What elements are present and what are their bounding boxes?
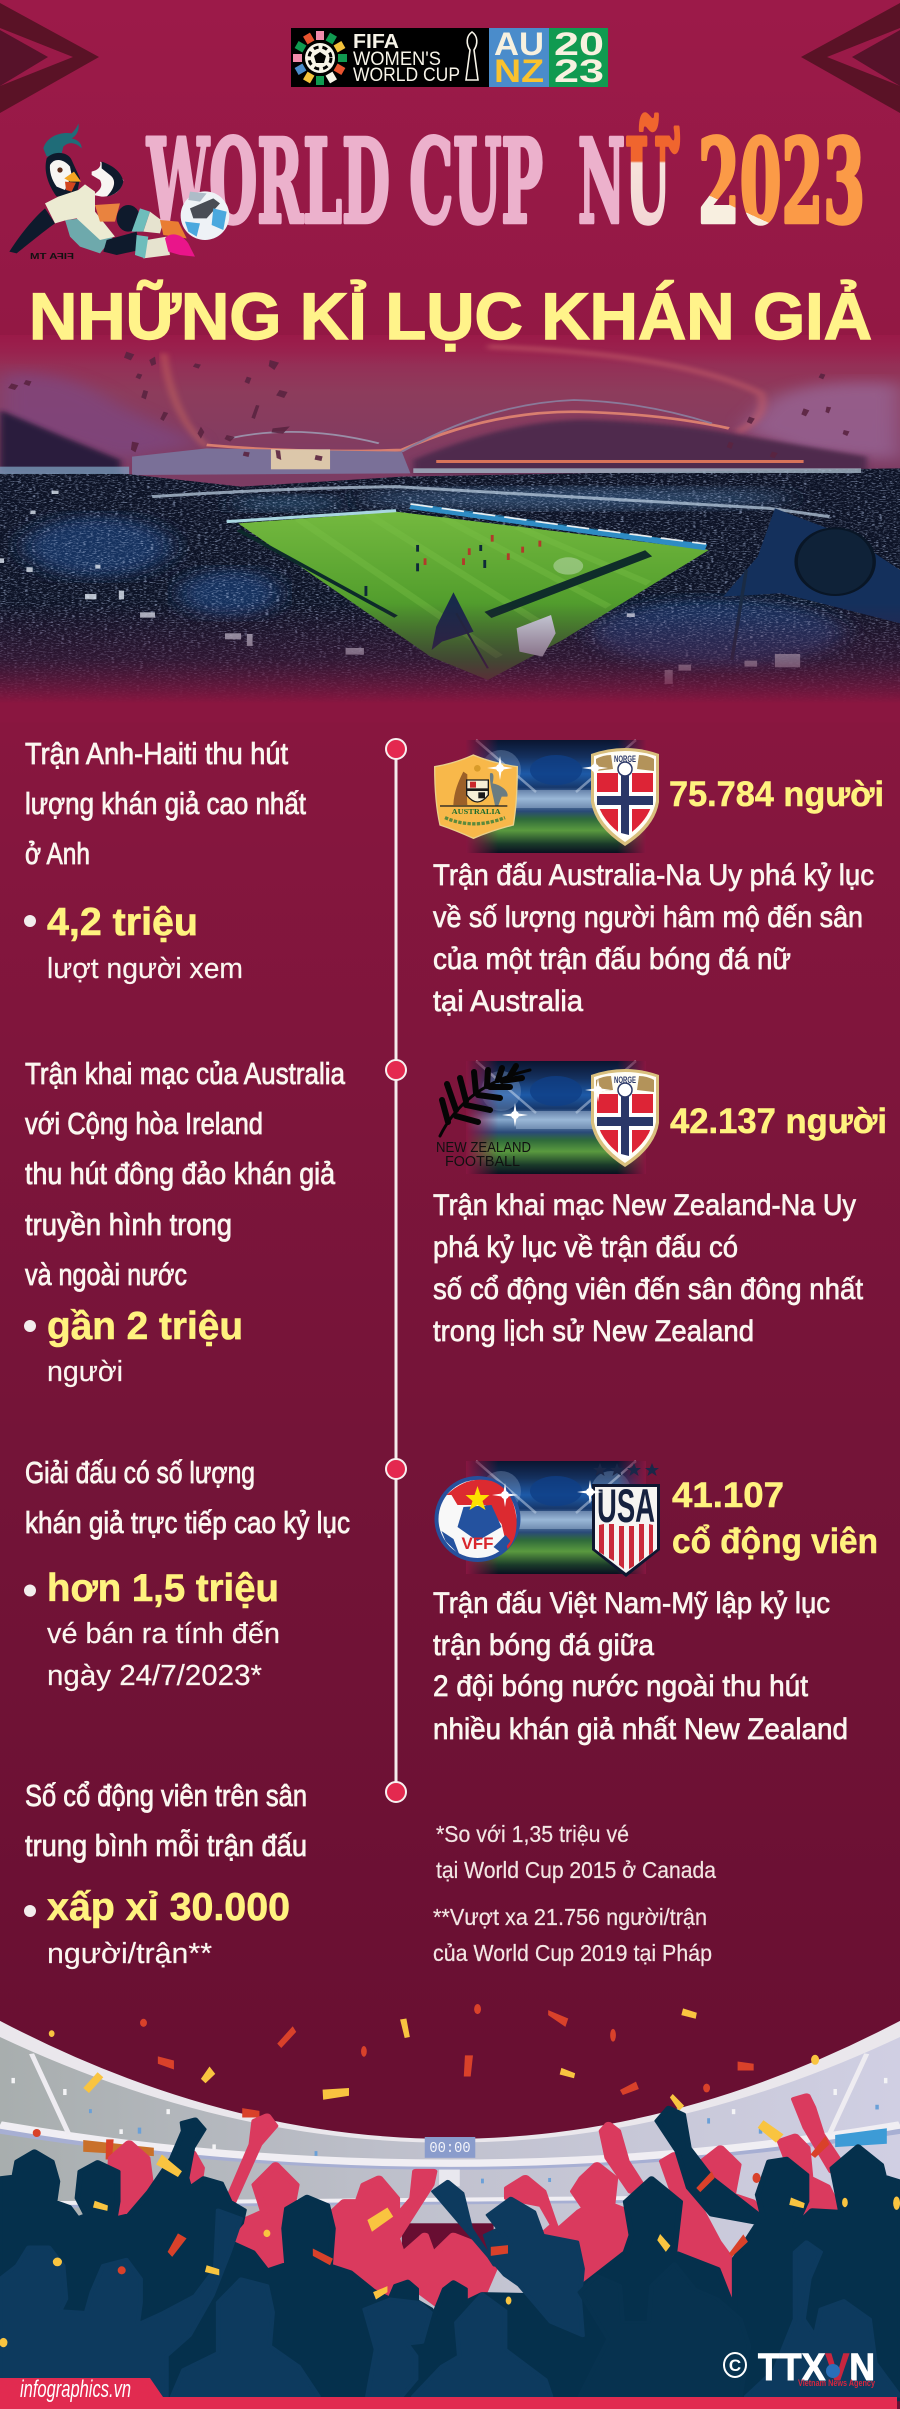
- text: New Zealand - Na Uy: trong lịch sử New Zealand: [433, 1315, 754, 1348]
- match card 1: Australia - Norway: [435, 740, 884, 853]
- flags: [432, 592, 474, 650]
- logo: TTXVN: TTXVN: [758, 2347, 875, 2389]
- left block 1: Anh-Haiti: ở Anh: [25, 836, 90, 871]
- text: Australia - Na Uy: tại Australia: [433, 985, 583, 1018]
- source: infographics.vn: infographics.vn: [20, 2376, 131, 2403]
- footnotes: của World Cup 2019 tại Pháp: [433, 1940, 712, 1966]
- stat: 42.137 người: 42.137 người: [670, 1102, 887, 1141]
- dark crowd layer: [0, 2107, 900, 2400]
- icon: Norway crest: NORGE: [614, 1075, 636, 1085]
- left block 3: khán giả trực tiếp: [24, 1455, 350, 1692]
- logo: FIFA Women's World Cup: FIFA: [353, 31, 399, 53]
- illustration: cheering crowd in stadium: [0, 2004, 900, 2400]
- timeline dot 4: [386, 1782, 406, 1802]
- text: New Zealand - Na Uy: [433, 1189, 864, 1348]
- icon: USA crest: USA: [597, 1479, 655, 1532]
- left block 3: khán giả trực tiếp: vé bán ra tính đến: [47, 1618, 280, 1650]
- text: New Zealand - Na Uy: số cổ động viên đến sân đông nhất: [433, 1273, 864, 1306]
- left block 2: khai mạc Australia: truyền hình trong: [25, 1207, 232, 1242]
- icon: trophy: [466, 32, 478, 80]
- left block 1: Anh-Haiti: [24, 736, 306, 985]
- left block 4: trung bình mỗi trận: trung bình mỗi trận đấu: [25, 1828, 307, 1863]
- icon: USA crest: [592, 1463, 660, 1577]
- left block 4: trung bình mỗi trận: [24, 1778, 307, 1970]
- footer bar: [0, 2376, 897, 2409]
- logo: FIFA Women's World Cup: WOMEN'S: [353, 49, 441, 70]
- stat: 41.107 cổ động viên: cổ động viên: [672, 1522, 878, 1561]
- stadium photo: [0, 335, 900, 723]
- text: Australia - Na Uy: [433, 859, 874, 1018]
- stands: [0, 2021, 900, 2336]
- logo: FIFA Women's World Cup: NZ: [494, 53, 544, 89]
- corner chevrons: right: [801, 3, 900, 113]
- subtitle: Những kỉ lục khán giả: NHỮNG KỈ LỤC KHÁN GIẢ: [29, 279, 872, 353]
- match card 2: New Zealand - Norway: NEW ZEALAND: [436, 1139, 531, 1156]
- timeline dot 3: [386, 1459, 406, 1479]
- left block 4: trung bình mỗi trận: Số cổ động viên trên sân: [25, 1778, 307, 1813]
- mascot: Tazuni with ball: FIFA TM: [30, 252, 74, 261]
- logo: TTXVN: C: [729, 2356, 741, 2375]
- mascot: Tazuni with ball: [9, 123, 229, 261]
- logo: FIFA Women's World Cup: AU: [494, 26, 544, 62]
- left block 1: Anh-Haiti: 4,2 triệu: [47, 901, 198, 944]
- left block 1: Anh-Haiti: lượt người xem: [47, 953, 243, 985]
- text: Việt Nam - Mỹ: [433, 1587, 848, 1746]
- text: Australia - Na Uy: về số lượng người hâm mộ đến sân: [433, 901, 863, 934]
- stat: 75.784 người: 75.784 người: [669, 775, 884, 814]
- left block 2: khai mạc Australia: gần 2 triệu: [47, 1305, 243, 1348]
- crowd stands: [0, 468, 900, 720]
- text: Việt Nam - Mỹ: Trận đấu Việt Nam-Mỹ lập kỷ lục: [433, 1587, 830, 1620]
- left block 2: khai mạc Australia: thu hút đông đảo khán giả: [25, 1156, 336, 1191]
- timeline: [386, 739, 406, 1802]
- sky confetti: [8, 352, 850, 461]
- stat: 41.107 cổ động viên: [672, 1476, 878, 1561]
- icon: Australia crest: AUSTRALIA: [452, 807, 501, 816]
- left block 4: trung bình mỗi trận: xấp xỉ 30.000: [47, 1886, 290, 1929]
- left block 1: Anh-Haiti: lượng khán giả cao nhất: [25, 786, 306, 821]
- confetti: [33, 2004, 819, 2160]
- left block 3: khán giả trực tiếp: Giải đấu có số lượng: [25, 1455, 255, 1490]
- icon: emblem: [293, 31, 347, 85]
- footnotes: **Vượt xa 21.756 người/trận: [433, 1904, 707, 1930]
- logo: FIFA Women's World Cup: [291, 26, 608, 89]
- logo: FIFA Women's World Cup: 23: [554, 53, 604, 89]
- left block 2: khai mạc Australia: người: [47, 1356, 123, 1388]
- left block 1: Anh-Haiti: Trận Anh-Haiti thu hút: [25, 736, 288, 771]
- pink crowd layer: [109, 2096, 841, 2312]
- timeline dot 2: [386, 1060, 406, 1080]
- icon: New Zealand fern: [440, 1066, 530, 1136]
- icon: Norway crest: [591, 748, 659, 846]
- text: Australia - Na Uy: Trận đấu Australia-Na Uy phá kỷ lục: [433, 859, 874, 892]
- logo: FIFA Women's World Cup: 20: [554, 26, 604, 62]
- icon: VFF crest: VFF: [462, 1534, 494, 1553]
- scoreboard: 00:00: [429, 2140, 471, 2157]
- pitch: [238, 512, 709, 680]
- match card 2: New Zealand - Norway: [436, 1061, 887, 1174]
- left block 2: khai mạc Australia: với Cộng hòa Ireland: [25, 1106, 263, 1141]
- text: Việt Nam - Mỹ: nhiều khán giả nhất New Zealand: [433, 1713, 848, 1746]
- icon: Norway crest: [591, 1069, 659, 1167]
- left block 2: khai mạc Australia: và ngoài nước: [25, 1257, 187, 1292]
- icon: Australia crest: [435, 755, 517, 838]
- logo: TTXVN: Vietnam News Agency: [798, 2378, 875, 2388]
- confetti over crowd: [0, 2120, 900, 2347]
- left block 4: trung bình mỗi trận: người/trận**: [47, 1938, 212, 1970]
- text: New Zealand - Na Uy: phá kỷ lục về trận đấu có: [433, 1231, 738, 1264]
- footnotes: [433, 1821, 716, 1966]
- front crowd layer: [0, 2181, 900, 2396]
- text: Australia - Na Uy: của một trận đấu bóng đá nữ: [433, 943, 791, 976]
- footnotes: tại World Cup 2015 ở Canada: [436, 1857, 716, 1883]
- text: Việt Nam - Mỹ: 2 đội bóng nước ngoài thu hút: [433, 1670, 809, 1703]
- timeline dot 1: [386, 739, 406, 759]
- icon: VFF crest: [434, 1476, 520, 1562]
- text: Việt Nam - Mỹ: trận bóng đá giữa: [433, 1629, 654, 1662]
- footnotes: *So với 1,35 triệu vé: [436, 1821, 629, 1847]
- scoreboard: [425, 2137, 475, 2158]
- text: New Zealand - Na Uy: Trận khai mạc New Zealand-Na Uy: [433, 1189, 856, 1222]
- left block 3: khán giả trực tiếp: hơn 1,5 triệu: [47, 1567, 279, 1610]
- match card 2: New Zealand - Norway: FOOTBALL: [445, 1153, 520, 1170]
- stat: 41.107 cổ động viên: 41.107: [672, 1476, 784, 1515]
- left block 2: khai mạc Australia: Trận khai mạc của Australia: [25, 1056, 346, 1091]
- logo: FIFA Women's World Cup: WORLD CUP: [353, 65, 460, 86]
- left block 2: khai mạc Australia: [24, 1056, 346, 1388]
- icon: Norway crest: NORGE: [614, 754, 636, 764]
- left block 3: khán giả trực tiếp: ngày 24/7/2023*: [47, 1660, 262, 1692]
- left block 3: khán giả trực tiếp: khán giả trực tiếp cao kỷ lục: [25, 1505, 350, 1540]
- corner chevrons: left: [0, 3, 99, 113]
- match card 3: Vietnam - USA: [434, 1461, 878, 1577]
- title: World Cup nữ 2023: NỮ: [578, 115, 679, 250]
